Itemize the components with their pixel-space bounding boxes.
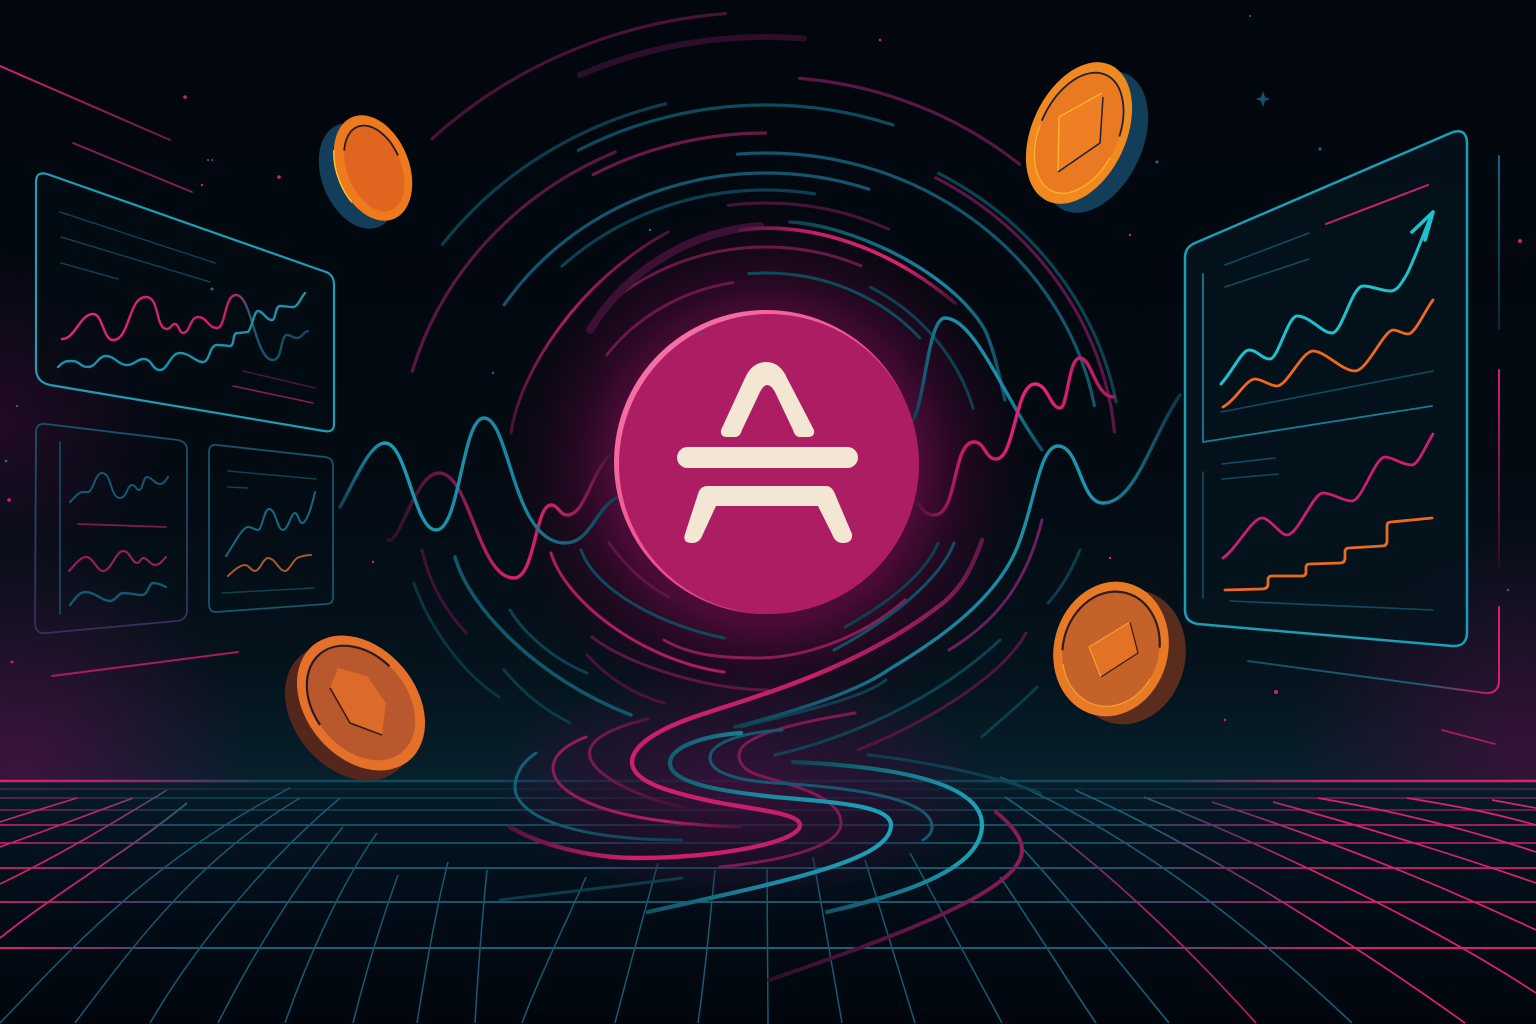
pink heading line <box>1326 185 1428 224</box>
left pink wave <box>388 455 610 578</box>
swirl rings <box>286 12 1246 912</box>
main pink ribbon <box>510 540 982 858</box>
inner pink ribbon <box>720 713 855 867</box>
upper chart axes <box>1203 274 1432 442</box>
grid converging lines left <box>0 788 715 1023</box>
coin: top left <box>304 104 427 240</box>
coin diamond emblem <box>1089 622 1138 677</box>
logo upper chevron <box>721 362 814 437</box>
upper swirl arcs <box>286 12 1246 912</box>
decorative pink streaks <box>0 66 238 676</box>
inner swirl arcs <box>486 203 1046 721</box>
price wave lines <box>340 318 1180 727</box>
grid centre lines <box>767 853 1002 1024</box>
flowing ribbons <box>500 540 1040 980</box>
faint upper ribbon strokes <box>500 633 1040 900</box>
central token <box>614 310 919 614</box>
large pink ribbon <box>769 812 1022 980</box>
lower swirl arcs <box>414 520 1080 723</box>
scattered stars <box>5 15 1522 721</box>
left teal wave <box>340 418 616 543</box>
panel: large left chart <box>36 173 334 431</box>
coin hexagon emblem <box>330 668 386 735</box>
outer pink ribbon <box>553 737 741 827</box>
left outer teal ribbon <box>515 753 682 840</box>
right dashboard panel <box>1185 131 1499 744</box>
coin: top right <box>1005 45 1169 230</box>
right pink wave <box>916 358 1114 515</box>
right teal wave lower <box>735 395 1180 727</box>
swash behind the top arc <box>590 226 760 330</box>
coin: bottom left <box>259 610 451 806</box>
main teal ribbon <box>648 733 891 912</box>
coin diamond emblem <box>1058 93 1103 172</box>
pink line chart <box>1223 434 1433 558</box>
grid horizontal lines <box>0 781 1536 948</box>
bright teal arc at top <box>790 222 1005 400</box>
grid converging lines right <box>1000 777 1536 1023</box>
logo middle bar <box>677 447 858 468</box>
token rim highlight <box>614 310 918 614</box>
token face <box>619 314 919 614</box>
left pink arc <box>511 232 668 433</box>
left dashboard panels <box>0 66 334 676</box>
icon: sparkle star <box>1256 91 1270 107</box>
right teal wave upper <box>913 318 1042 450</box>
panel: small left chart B <box>209 445 333 612</box>
side accent lines <box>1248 156 1499 744</box>
panel frame <box>1185 131 1467 646</box>
large teal ribbon <box>793 762 982 912</box>
orange step chart <box>1225 518 1432 590</box>
perspective grid floor <box>0 777 1536 1024</box>
bright pink arc at top <box>740 228 955 303</box>
glow behind the coin and ribbons <box>490 205 1031 900</box>
logo lower bracket <box>684 486 852 543</box>
faint pink ribbon <box>590 719 686 808</box>
coin: bottom right <box>1038 569 1201 737</box>
orange line chart <box>1223 300 1433 407</box>
cyan rising arrow <box>1221 212 1433 384</box>
teal line chart <box>58 293 305 370</box>
panel: small left chart A <box>35 424 187 633</box>
inner teal ribbon <box>710 730 932 840</box>
token logo <box>677 362 858 543</box>
pink line chart <box>62 295 308 360</box>
